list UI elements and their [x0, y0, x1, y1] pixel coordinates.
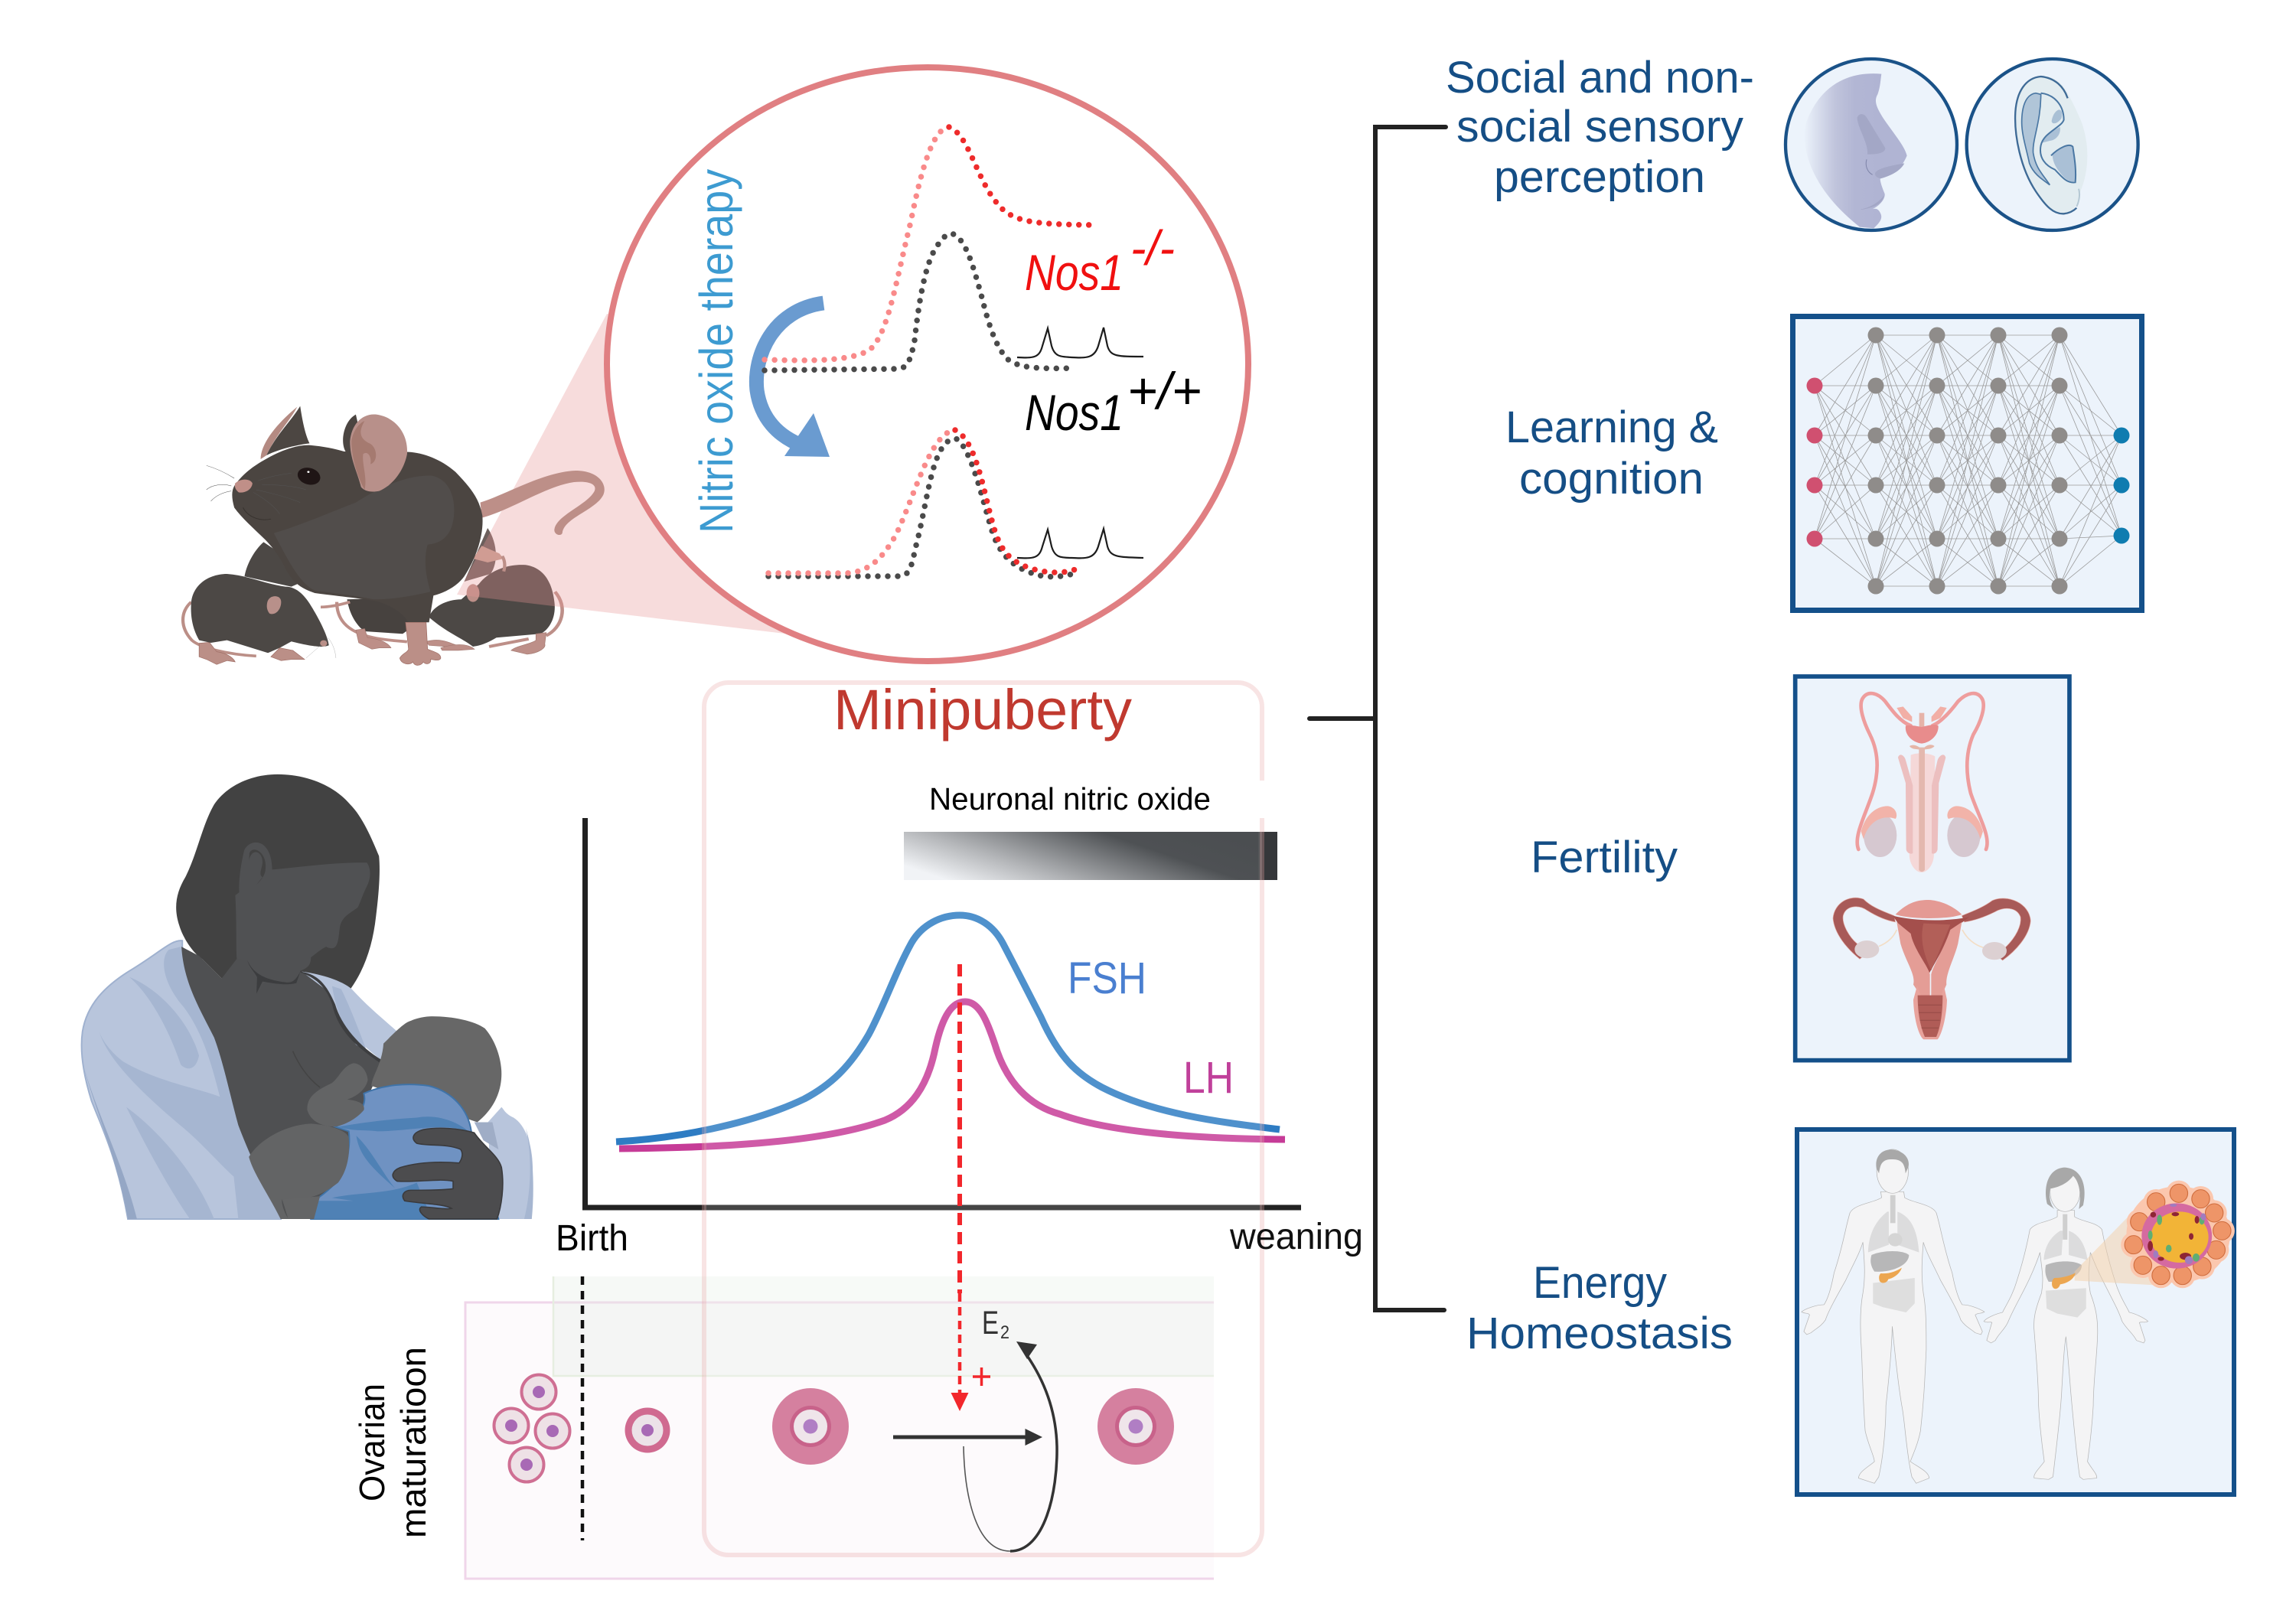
label: Nos1 wild type: +/+	[1127, 362, 1202, 420]
label: FSH: FSH	[1068, 953, 1146, 1003]
label: E2: 2	[1000, 1322, 1009, 1343]
icon: secondary follicle	[772, 1388, 849, 1465]
chart: FSH and LH curves with axes	[585, 818, 1301, 1208]
arrow: estradiol feedback loop	[964, 1341, 1057, 1551]
label: nitric oxide therapy: Nitric oxide therapy	[690, 169, 742, 533]
panel: neural network	[1792, 317, 2141, 611]
label: neuronal nitric oxide: Neuronal nitric oxide	[929, 781, 1211, 817]
icon: pancreatic islet	[2121, 1181, 2235, 1288]
label: Nos1 knockout: Nos1	[1025, 244, 1124, 301]
label: Nos1 wild type: Nos1	[1025, 384, 1124, 441]
zoom cone from mouse to circle	[457, 314, 928, 635]
icon: nose circle	[1786, 59, 1957, 230]
male figure	[1802, 1149, 1985, 1483]
label: fertility: Fertility	[1531, 833, 1678, 882]
label: weaning: weaning	[1229, 1217, 1363, 1257]
female figure	[1984, 1168, 2162, 1479]
arrow: red dashed FSH/LH action	[951, 964, 969, 1411]
panel: hypothalamic band	[553, 1276, 1214, 1376]
icon: primary follicle	[625, 1408, 670, 1452]
panel: minipuberty window	[704, 683, 1262, 1555]
label: Nos1 knockout	[1025, 220, 1175, 301]
panel: circle inset	[607, 67, 1248, 661]
panel: human bodies and pancreas	[1797, 1129, 2235, 1495]
label: sensory perception: perception	[1494, 152, 1705, 202]
label: Birth: Birth	[556, 1218, 628, 1259]
label: Nos1 wild type	[1025, 362, 1202, 441]
chart: bottom small spikes	[1017, 529, 1143, 558]
icon: secondary follicle right	[1097, 1388, 1174, 1465]
icon: breastfeeding mother and infant	[82, 774, 533, 1219]
icon: mouse pups behind adult	[245, 528, 563, 654]
gradient bar: neuronal nitric oxide	[904, 832, 1277, 880]
panel: reproductive organs	[1795, 676, 2069, 1061]
arrow: therapy curved arrow	[756, 303, 830, 457]
label: learning and cognition	[1505, 403, 1718, 504]
chart: top small spikes	[1017, 328, 1143, 357]
label: E2: E	[982, 1305, 999, 1341]
arrow: follicle maturation	[893, 1429, 1042, 1446]
label: energy homeostasis	[1466, 1258, 1733, 1358]
label: learning and cognition: Learning &	[1505, 403, 1718, 452]
label: plus sign	[973, 1367, 990, 1386]
label: sensory perception	[1446, 53, 1754, 202]
chart: bottom pulse traces	[768, 430, 1081, 577]
label: LH: LH	[1183, 1053, 1234, 1103]
label: learning and cognition: cognition	[1519, 454, 1704, 504]
chart: top pulse traces	[765, 127, 1093, 370]
label: ovarian maturation: Ovarian	[352, 1384, 392, 1501]
label: ovarian maturation: maturatioon	[393, 1347, 433, 1538]
label: ovarian maturation	[352, 1347, 433, 1538]
label: sensory perception: Social and non-	[1446, 53, 1754, 103]
label: energy homeostasis: Homeostasis	[1466, 1309, 1733, 1358]
label: Nos1 knockout: -/-	[1130, 220, 1175, 275]
icon: ear circle	[1967, 59, 2138, 230]
bracket: outcomes connector	[1309, 127, 1446, 1310]
label: sensory perception: social sensory	[1456, 102, 1743, 152]
gradient bar fill	[904, 832, 1258, 880]
icon: primordial follicles	[494, 1374, 569, 1482]
panel: ovarian maturation background	[465, 1302, 1214, 1579]
birth dashed line	[581, 1276, 584, 1540]
icon: adult mouse with pups	[183, 406, 605, 665]
mask behind label edge	[1251, 781, 1274, 818]
label: energy homeostasis: Energy	[1533, 1258, 1667, 1308]
heading: Minipuberty: Minipuberty	[833, 678, 1132, 742]
